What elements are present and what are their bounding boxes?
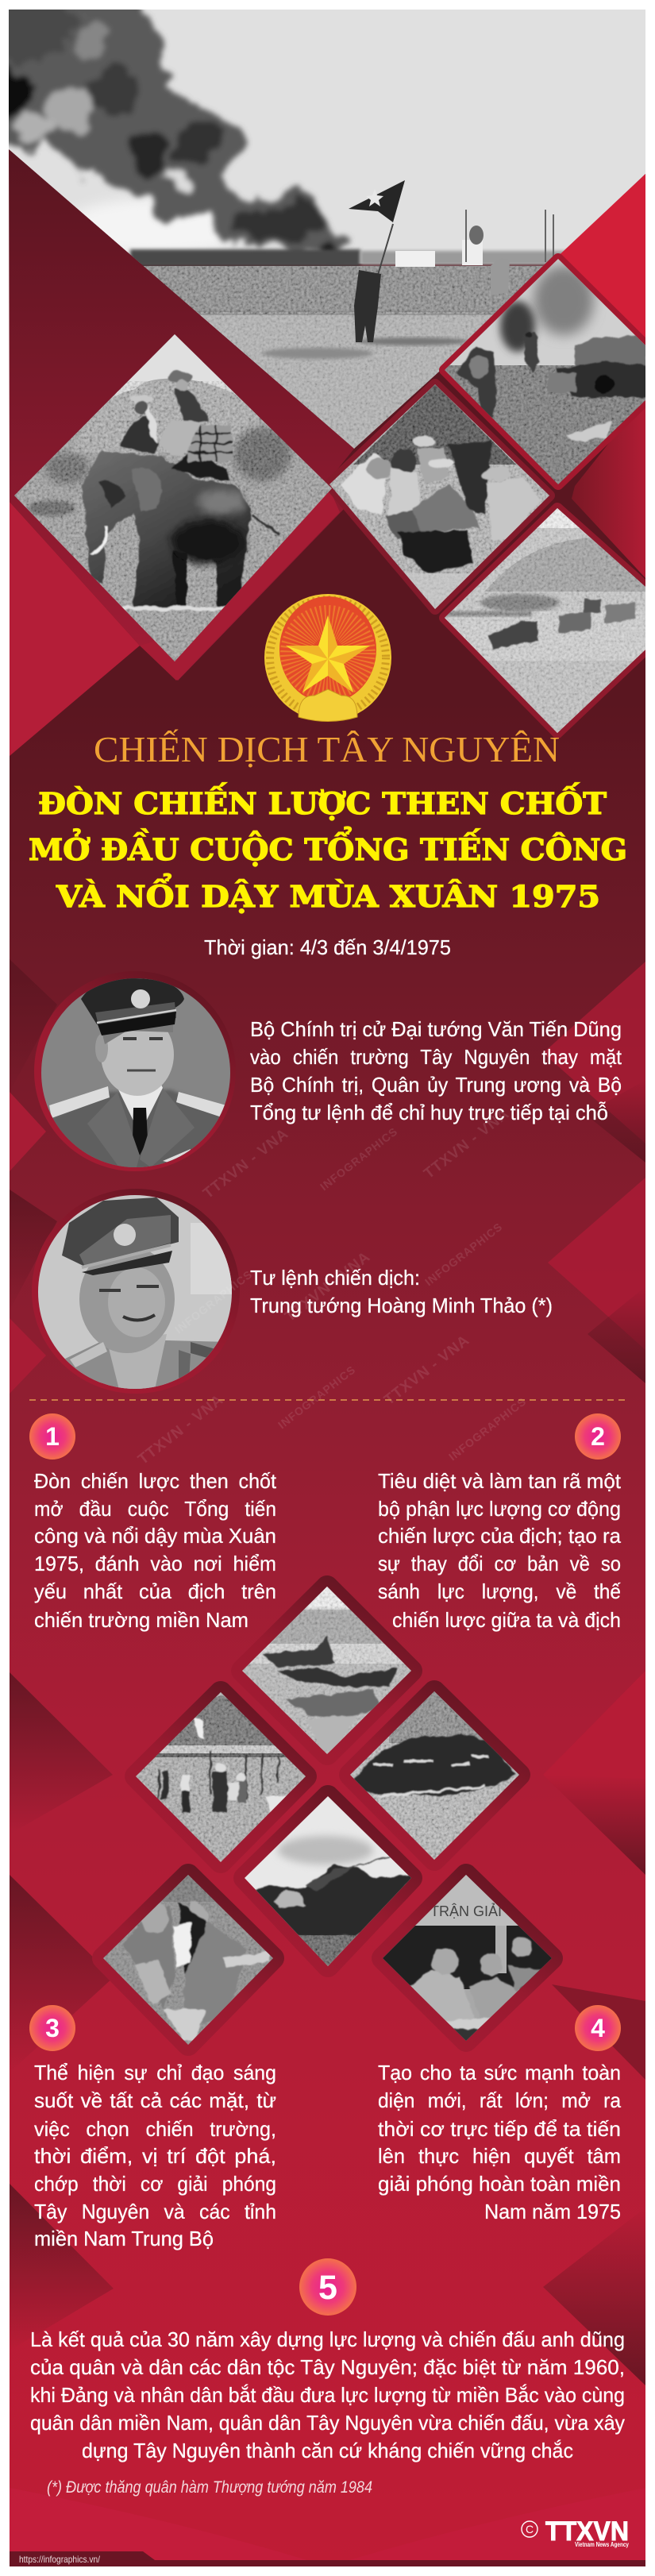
bottom strip with url xyxy=(10,2551,645,2566)
point 2 text: chiến lược của địch; tạo ra xyxy=(378,1524,622,1548)
watermarks xyxy=(135,1105,529,1468)
badge 3 xyxy=(29,2005,75,2051)
point 3 text: miền Nam Trung Bộ xyxy=(34,2227,214,2250)
point 4 text: giải phóng hoàn toàn miền xyxy=(378,2172,621,2196)
top right diamond frame xyxy=(445,259,645,484)
point 2 text: bộ phận lực lượng cơ động xyxy=(378,1497,621,1521)
text: Văn Tiến Dũng: Bộ Chính trị cử Đại tướng Văn Tiến Dũng xyxy=(250,1017,622,1041)
main headline: ĐÒN CHIẾN LƯỢC THEN CHỐT xyxy=(38,782,607,821)
middle photo: civilians and soldiers xyxy=(329,381,556,613)
background geometric shapes xyxy=(10,959,645,2566)
badge 4: 4 xyxy=(591,2014,605,2042)
point 4 text: Tạo cho ta sức mạnh toàn xyxy=(378,2061,621,2084)
emblem star xyxy=(286,615,370,692)
hero photo: soldier with flag and smoke xyxy=(0,0,646,479)
badge 5 xyxy=(299,2258,356,2316)
watermarks: INFOGRAPHICS xyxy=(446,1394,529,1463)
right gradient shape xyxy=(572,397,645,578)
photo: soldiers seated xyxy=(350,1691,519,1860)
text: Hoàng Minh Thảo: Trung tướng Hoàng Minh Thảo (*) xyxy=(250,1294,553,1317)
main headline: VÀ NỔI DẬY MÙA XUÂN 1975 xyxy=(56,873,600,914)
text: Văn Tiến Dũng: Tổng tư lệnh để chỉ huy trực tiếp tại chỗ xyxy=(250,1101,608,1124)
point 3 text: suốt về tất cả các mặt, từ xyxy=(34,2088,276,2112)
point 3 text: việc chọn chiến trường, xyxy=(34,2117,276,2141)
time line: Thời gian: 4/3 đến 3/4/1975 xyxy=(204,935,451,959)
point 5 text: Là kết quả của 30 năm xây dựng lực lượng và chiến đấu anh dũng xyxy=(30,2327,625,2351)
text: Hoàng Minh Thảo xyxy=(250,1266,553,1317)
point 5 text: khi Đảng và nhân dân bắt đầu đưa lực lượng từ miền Bắc vào cùng xyxy=(30,2383,625,2407)
point 4 text: diện mới, rất lớn; mở ra xyxy=(378,2088,621,2112)
point 5 text: dựng Tây Nguyên thành căn cứ kháng chiến vững chắc xyxy=(82,2439,573,2462)
point 5 text xyxy=(30,2327,625,2462)
photo: soldiers working xyxy=(99,1870,278,2049)
point 3 text xyxy=(34,2061,276,2250)
bottom right photo: trucks crossing a river xyxy=(445,508,645,733)
point 1 text: yếu nhất của địch trên xyxy=(34,1579,276,1603)
bottom strip with url: https://infographics.vn/ xyxy=(19,2554,101,2565)
logo: TTXVN: TTXVN xyxy=(545,2516,629,2547)
point 3 text: chớp thời cơ giải phóng xyxy=(34,2172,276,2196)
emblem gear xyxy=(299,689,357,721)
badge 3: 3 xyxy=(45,2014,60,2042)
portrait: Văn Tiến Dũng xyxy=(32,971,238,1175)
point 3 text: Thể hiện sự chỉ đạo sáng xyxy=(34,2061,276,2084)
campaign title: CHIẾN DỊCH TÂY NGUYÊN xyxy=(94,728,560,769)
text: Hoàng Minh Thảo: Tư lệnh chiến dịch: xyxy=(250,1266,420,1290)
point 3 text: Tây Nguyên và các tỉnh xyxy=(34,2200,276,2223)
point 4 text: Nam năm 1975 xyxy=(484,2200,621,2223)
point 1 text: công và nổi dậy mùa Xuân xyxy=(34,1524,276,1548)
middle diamond frame xyxy=(329,384,549,609)
text: Văn Tiến Dũng xyxy=(250,1017,622,1124)
elephant diamond lower frame xyxy=(140,491,340,681)
point 1 text xyxy=(34,1469,277,1632)
main headline: MỞ ĐẦU CUỘC TỔNG TIẾN CÔNG xyxy=(29,827,627,867)
point 5 text: quân dân miền Nam, quân dân Tây Nguyên vừa chiến đấu, vừa xây xyxy=(30,2411,625,2435)
point 1 text: Đòn chiến lược then chốt xyxy=(34,1469,277,1493)
logo: TTXVN: C xyxy=(526,2523,534,2536)
footnote: (*) Được thăng quân hàm Thượng tướng năm 1984 xyxy=(47,2478,372,2497)
photo: officers at table xyxy=(383,1875,552,2041)
right bright red triangle xyxy=(552,174,645,353)
photo: officers at table: TRẬN GIẢI xyxy=(430,1903,502,1919)
badge 2: 2 xyxy=(591,1422,605,1451)
logo: TTXVN: Vietnam News Agency xyxy=(575,2541,629,2548)
top right photo: battlefield xyxy=(441,254,647,488)
point 1 text: mở đầu cuộc Tổng tiến xyxy=(34,1497,276,1521)
emblem wreath xyxy=(264,594,391,721)
left dark panel xyxy=(9,149,354,681)
watermarks: INFOGRAPHICS xyxy=(318,1124,400,1193)
point 2 text xyxy=(378,1469,622,1632)
main headline xyxy=(29,782,627,914)
point 5 text: của quân và dân các dân tộc Tây Nguyên; đặc biệt từ năm 1960, xyxy=(30,2355,625,2379)
badge 5: 5 xyxy=(318,2269,337,2307)
point 1 text: chiến trường miền Nam xyxy=(34,1608,249,1632)
elephant photo xyxy=(8,330,341,667)
badge 1 xyxy=(29,1413,75,1460)
watermarks: TTXVN - VNA xyxy=(135,1391,227,1468)
badge 1: 1 xyxy=(45,1422,60,1451)
watermarks: INFOGRAPHICS xyxy=(172,1267,255,1336)
left bright red shape xyxy=(10,502,140,756)
diamond frames group xyxy=(103,1587,552,2045)
watermarks: TTXVN - VNA xyxy=(381,1332,473,1409)
emblem xyxy=(264,594,391,721)
text: Văn Tiến Dũng: Bộ Chính trị, Quân ủy Trung ương và Bộ xyxy=(250,1073,622,1097)
point 2 text: Tiêu diệt và làm tan rã một xyxy=(378,1469,622,1493)
watermarks: TTXVN - VNA xyxy=(421,1105,513,1182)
emblem red disc xyxy=(279,596,376,703)
point 2 text: chiến lược giữa ta và địch xyxy=(392,1608,621,1632)
bottom right diamond frame xyxy=(445,508,645,733)
badge 4 xyxy=(575,2005,621,2051)
watermarks: INFOGRAPHICS xyxy=(422,1220,505,1288)
divider xyxy=(29,1399,625,1401)
watermarks: TTXVN - VNA xyxy=(282,1248,374,1325)
photo: destroyed helicopter xyxy=(245,1796,411,1966)
point 1 text: 1975, đánh vào nơi hiểm xyxy=(34,1552,276,1575)
point 2 text: sánh lực lượng, về thế xyxy=(378,1579,622,1603)
point 4 text: thời cơ trực tiếp để ta tiến xyxy=(378,2117,621,2141)
watermarks: INFOGRAPHICS xyxy=(275,1363,358,1431)
point 3 text: thời điểm, vị trí đột phá, xyxy=(34,2144,276,2168)
watermarks: TTXVN - VNA xyxy=(200,1125,292,1202)
photo: destroyed vehicles xyxy=(238,1584,417,1759)
point 2 text: sự thay đổi cơ bản về so xyxy=(378,1552,621,1575)
portrait: Hoàng Minh Thảo xyxy=(32,1189,240,1394)
text: Văn Tiến Dũng: vào chiến trường Tây Nguyên thay mặt xyxy=(250,1045,622,1069)
point 4 text: lên thực hiện quyết tâm xyxy=(378,2144,621,2168)
point 4 text xyxy=(378,2061,621,2223)
photo: soldiers in grass xyxy=(131,1687,310,1866)
badge 2 xyxy=(575,1413,621,1460)
